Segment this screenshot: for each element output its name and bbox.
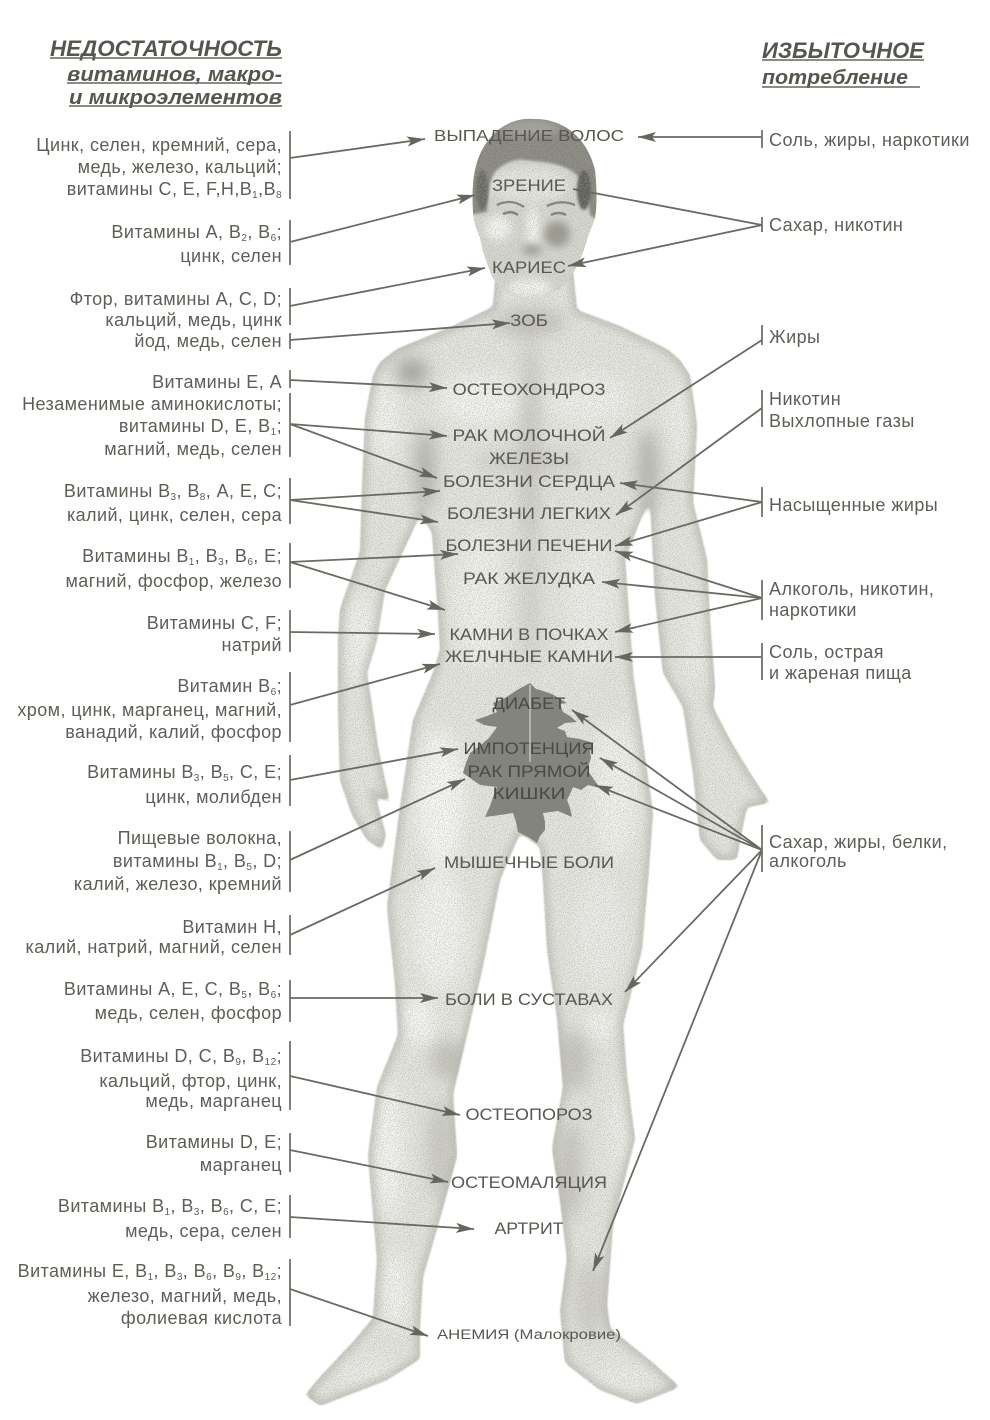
group: hair: ,В bbox=[258, 179, 276, 199]
heading: deficiency: витаминов, макро- bbox=[67, 64, 282, 86]
group: rectal cancer: 5 bbox=[246, 862, 252, 873]
condition labels: ЗОБ bbox=[510, 311, 548, 330]
group: anemia: 12 bbox=[265, 1272, 277, 1283]
group: hair: медь, железо, кальций; bbox=[78, 157, 282, 177]
group: osteoporosis: 9 bbox=[235, 1057, 241, 1068]
group: liver and stomach: Витамины В bbox=[82, 546, 189, 566]
group: vision bbox=[111, 220, 290, 266]
item: alcohol, nicotine, drugs: наркотики bbox=[769, 600, 857, 620]
head bbox=[472, 118, 596, 295]
condition labels: ОСТЕОМАЛЯЦИЯ bbox=[451, 1173, 607, 1192]
group: vision: 2 bbox=[241, 233, 247, 244]
group: anemia: , В bbox=[241, 1261, 265, 1281]
group: vision: 6 bbox=[271, 233, 277, 244]
group: liver and stomach: , Е; bbox=[253, 546, 282, 566]
group: anemia: железо, магний, медь, bbox=[88, 1286, 282, 1306]
group: arthritis: , В bbox=[171, 1196, 194, 1216]
group: heart and lungs: калий, цинк, селен, сера bbox=[67, 505, 283, 525]
group: rectal cancer: , В bbox=[223, 851, 246, 871]
group: liver and stomach: , В bbox=[195, 546, 218, 566]
group: osteomalacia: Витамины D, Е; bbox=[146, 1132, 282, 1152]
condition labels: АРТРИТ bbox=[494, 1219, 564, 1238]
group: arthritis: , В bbox=[200, 1196, 223, 1216]
group: impotence: 3 bbox=[194, 773, 200, 784]
heading: excess: потребление bbox=[762, 67, 908, 89]
group: arthritis: 1 bbox=[165, 1207, 171, 1218]
group: anemia: ; bbox=[277, 1261, 282, 1281]
skin grain bbox=[300, 260, 780, 1420]
group: osteoporosis: ; bbox=[277, 1046, 282, 1066]
maple leaf bbox=[463, 683, 600, 843]
group: gallstones bbox=[17, 672, 290, 742]
condition labels: ИМПОТЕНЦИЯ bbox=[464, 739, 594, 758]
group: arthritis: медь, сера, селен bbox=[125, 1221, 282, 1241]
arrows: deficiency to condition bbox=[290, 139, 510, 1336]
item: salt, spicy and fried food: Соль, острая bbox=[769, 642, 884, 662]
group: anemia: 1 bbox=[148, 1272, 154, 1283]
item: nicotine, exhaust: Выхлопные газы bbox=[769, 411, 915, 431]
condition labels: МЫШЕЧНЫЕ БОЛИ bbox=[444, 853, 614, 872]
group: vision: Витамины А, В bbox=[111, 222, 241, 242]
condition labels: РАК ПРЯМОЙ bbox=[468, 762, 590, 781]
group: osteoporosis: кальций, фтор, цинк, bbox=[99, 1071, 282, 1091]
group: caries bbox=[70, 288, 290, 330]
item: sugar, fats, protein, alcohol bbox=[762, 825, 948, 872]
group: gallstones: ванадий, калий, фосфор bbox=[65, 722, 282, 742]
group: muscle pain: калий, натрий, магний, селен bbox=[26, 937, 282, 957]
group: kidney stones: Витамины С, F; bbox=[147, 613, 282, 633]
group: breast cancer and heart bbox=[22, 393, 290, 459]
condition labels: БОЛЕЗНИ СЕРДЦА bbox=[443, 472, 616, 491]
item: sugar, nicotine: Сахар, никотин bbox=[769, 215, 903, 235]
group: liver and stomach bbox=[65, 543, 290, 591]
group: rectal cancer bbox=[74, 828, 290, 894]
group: anemia bbox=[18, 1259, 290, 1328]
group: heart and lungs: 3 bbox=[171, 492, 177, 503]
condition labels: ДИАБЕТ bbox=[492, 694, 566, 713]
condition labels: РАК МОЛОЧНОЙ bbox=[452, 426, 606, 445]
group: impotence: цинк, молибден bbox=[145, 787, 282, 807]
group: joint pain: медь, селен, фосфор bbox=[95, 1003, 282, 1023]
group: liver and stomach: 3 bbox=[218, 557, 224, 568]
item: salt, spicy and fried food bbox=[762, 642, 912, 683]
group: muscle pain: Витамин Н, bbox=[182, 917, 282, 937]
condition labels: КАРИЕС bbox=[492, 258, 566, 277]
condition labels: ЖЕЛЧНЫЕ КАМНИ bbox=[445, 647, 613, 666]
group: anemia: 9 bbox=[235, 1272, 241, 1283]
item: nicotine, exhaust bbox=[762, 389, 915, 431]
heading: excess: ИЗБЫТОЧНОЕ bbox=[762, 38, 925, 63]
group: arthritis: 3 bbox=[194, 1207, 200, 1218]
condition labels: ЖЕЛЕЗЫ bbox=[489, 449, 569, 468]
group: rectal cancer: , D; bbox=[252, 851, 282, 871]
group: kidney stones: натрий bbox=[222, 635, 282, 655]
group: hair: 1 bbox=[252, 190, 258, 201]
group: hair bbox=[36, 131, 290, 201]
group: vision: цинк, селен bbox=[180, 246, 282, 266]
group: rectal cancer: Пищевые волокна, bbox=[118, 828, 282, 848]
group: impotence: 5 bbox=[223, 773, 229, 784]
group: joint pain bbox=[64, 979, 290, 1023]
group: gallstones: хром, цинк, марганец, магний, bbox=[17, 700, 282, 720]
brows and eyes bbox=[497, 202, 575, 207]
group: kidney stones bbox=[147, 610, 290, 655]
group: caries: кальций, медь, цинк bbox=[105, 310, 282, 330]
condition labels bbox=[434, 128, 624, 1342]
facial shading bbox=[485, 215, 511, 241]
group: hair: 8 bbox=[276, 190, 282, 201]
group: liver and stomach: 6 bbox=[247, 557, 253, 568]
group: osteomalacia: марганец bbox=[200, 1155, 282, 1175]
group: joint pain: 6 bbox=[271, 990, 277, 1001]
group: osteoporosis: медь, марганец bbox=[145, 1091, 282, 1111]
group: heart and lungs: Витамины В bbox=[64, 481, 171, 501]
group: joint pain: ; bbox=[277, 979, 282, 999]
arrows: excess to condition bbox=[568, 137, 762, 1271]
condition labels: КИШКИ bbox=[492, 784, 566, 803]
hair bbox=[472, 118, 596, 220]
group: rectal cancer: 1 bbox=[217, 862, 223, 873]
group: breast cancer and heart: витамины D, Е, В bbox=[119, 416, 271, 436]
condition labels: ОСТЕОПОРОЗ bbox=[466, 1105, 592, 1124]
group: osteoporosis bbox=[80, 1041, 290, 1111]
group: vision: , В bbox=[247, 222, 271, 242]
item: alcohol, nicotine, drugs: Алкоголь, никотин, bbox=[769, 579, 934, 599]
group: liver and stomach: 1 bbox=[189, 557, 195, 568]
shading patches bbox=[335, 310, 707, 1390]
item: alcohol, nicotine, drugs bbox=[762, 579, 934, 620]
group: heart and lungs: 8 bbox=[200, 492, 206, 503]
group: liver and stomach: магний, фосфор, железо bbox=[65, 571, 282, 591]
group: osteoporosis: 12 bbox=[265, 1057, 277, 1068]
group: goiter: йод, медь, селен bbox=[134, 331, 282, 351]
group: arthritis: , С, Е; bbox=[229, 1196, 282, 1216]
group: impotence: Витамины В bbox=[87, 762, 194, 782]
group: anemia: , В bbox=[183, 1261, 206, 1281]
condition labels: КАМНИ В ПОЧКАХ bbox=[450, 625, 608, 644]
figure: human body bbox=[300, 110, 780, 1420]
group: liver and stomach: , В bbox=[224, 546, 247, 566]
heading: deficiency: и микроэлементов bbox=[69, 87, 282, 109]
group: osteoporosis: , В bbox=[241, 1046, 265, 1066]
group: arthritis: 6 bbox=[223, 1207, 229, 1218]
group: anemia: Витамины Е, В bbox=[18, 1261, 148, 1281]
condition labels: БОЛЕЗНИ ПЕЧЕНИ bbox=[446, 536, 612, 555]
group: heart and lungs: , В bbox=[177, 481, 200, 501]
group: rectal cancer: витамины В bbox=[113, 851, 217, 871]
group: impotence: , С, Е; bbox=[229, 762, 282, 782]
group: caries: Фтор, витамины А, С, D; bbox=[70, 289, 282, 309]
right column: excess items bbox=[762, 130, 970, 872]
item: nicotine, exhaust: Никотин bbox=[769, 389, 841, 409]
heading: excess bbox=[762, 38, 925, 89]
left column: nutrient lists bbox=[17, 131, 290, 1328]
group: breast cancer and heart: ; bbox=[277, 416, 282, 436]
heading: deficiency: НЕДОСТАТОЧНОСТЬ bbox=[50, 36, 282, 61]
condition labels: АНЕМИЯ (Малокровие) bbox=[437, 1327, 621, 1342]
group: gallstones: 6 bbox=[271, 687, 277, 698]
group: osteoporosis: Витамины D, С, В bbox=[80, 1046, 235, 1066]
item: saturated fats: Насыщенные жиры bbox=[769, 495, 938, 515]
group: rectal cancer: калий, железо, кремний bbox=[74, 874, 282, 894]
condition labels: БОЛЕЗНИ ЛЕГКИХ bbox=[447, 504, 611, 523]
group: joint pain: 5 bbox=[241, 990, 247, 1001]
heading: deficiency bbox=[50, 36, 282, 109]
group: heart and lungs: , А, Е, С; bbox=[206, 481, 282, 501]
group: breast cancer and heart: Незаменимые аминокислоты; bbox=[22, 394, 282, 414]
group: vision: ; bbox=[277, 222, 282, 242]
group: joint pain: Витамины А, Е, С, В bbox=[64, 979, 241, 999]
group: osteochondrosis: Витамины Е, А bbox=[152, 372, 282, 392]
group: gallstones: ; bbox=[277, 676, 282, 696]
group: joint pain: , В bbox=[247, 979, 271, 999]
group: breast cancer and heart: 1 bbox=[271, 427, 277, 438]
group: hair: витамины С, Е, F,Н,В bbox=[67, 179, 252, 199]
group: hair: Цинк, селен, кремний, сера, bbox=[36, 135, 282, 155]
item: salt, spicy and fried food: и жареная пища bbox=[769, 663, 912, 683]
item: fats: Жиры bbox=[769, 327, 820, 347]
condition labels: ЗРЕНИЕ bbox=[492, 176, 566, 195]
group: anemia: фолиевая кислота bbox=[121, 1308, 283, 1328]
condition labels: РАК ЖЕЛУДКА bbox=[463, 569, 596, 588]
group: heart and lungs bbox=[64, 478, 290, 525]
item: sugar, fats, protein, alcohol: алкоголь bbox=[769, 851, 847, 871]
group: breast cancer and heart: магний, медь, селен bbox=[104, 439, 282, 459]
condition labels: ОСТЕОХОНДРОЗ bbox=[452, 380, 606, 399]
group: osteomalacia bbox=[146, 1132, 290, 1175]
group: arthritis: Витамины В bbox=[58, 1196, 165, 1216]
group: anemia: , В bbox=[212, 1261, 235, 1281]
item: sugar, fats, protein, alcohol: Сахар, жиры, белки, bbox=[769, 832, 948, 852]
group: gallstones: Витамин В bbox=[177, 676, 271, 696]
group: anemia: 6 bbox=[206, 1272, 212, 1283]
condition labels: БОЛИ В СУСТАВАХ bbox=[445, 990, 613, 1009]
condition labels: ВЫПАДЕНИЕ ВОЛОС bbox=[434, 128, 624, 145]
group: anemia: , В bbox=[154, 1261, 177, 1281]
group: muscle pain bbox=[26, 915, 290, 957]
group: impotence bbox=[87, 755, 290, 807]
edge shading bbox=[305, 270, 770, 1406]
item: salt, fats, drugs: Соль, жиры, наркотики bbox=[769, 130, 970, 150]
group: anemia: 3 bbox=[177, 1272, 183, 1283]
group: arthritis bbox=[58, 1195, 290, 1241]
group: impotence: , В bbox=[200, 762, 223, 782]
